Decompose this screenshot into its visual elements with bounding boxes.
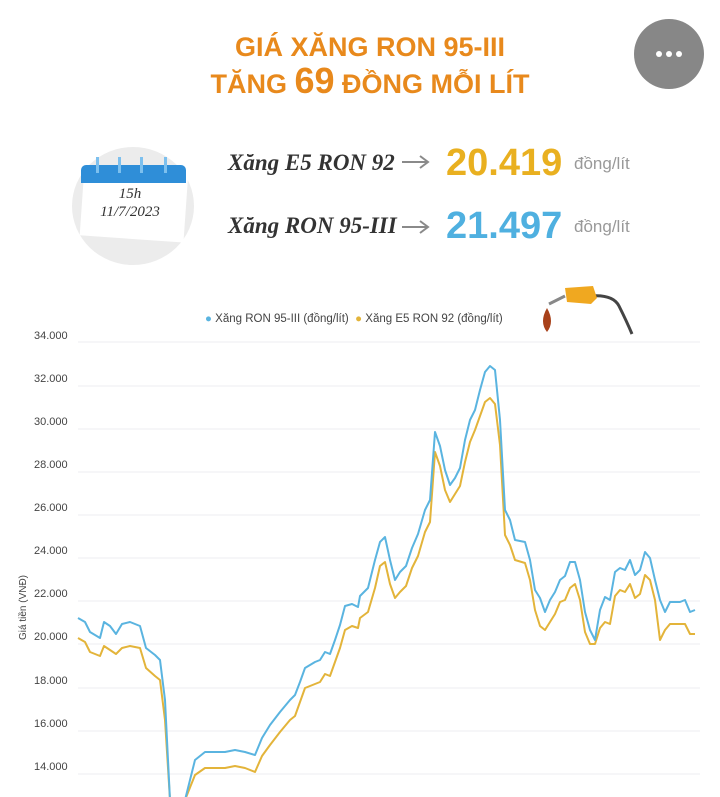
line chart: Giá tiền (VNĐ) — [17, 575, 29, 640]
chart legend: ● Xăng RON 95-III (đồng/lít) ● Xăng E5 RON 92 (đồng/lít) — [205, 313, 503, 325]
text block: E5 price — [227, 142, 630, 184]
line chart: 28.000 — [34, 459, 68, 471]
title: TĂNG 69 ĐỒNG MỖI LÍT — [210, 60, 530, 101]
line chart: 34.000 — [34, 330, 68, 342]
title — [210, 32, 530, 101]
icon: calendar: 11/7/2023 — [100, 204, 160, 220]
line chart: 26.000 — [34, 502, 68, 514]
icon: calendar — [72, 147, 194, 265]
text block: E5 price: Xăng E5 RON 92 — [228, 150, 395, 175]
line chart: 32.000 — [34, 373, 68, 385]
line chart: 22.000 — [34, 588, 68, 600]
title: GIÁ XĂNG RON 95-III — [235, 32, 505, 62]
text block: RON95 price — [227, 205, 630, 247]
line chart — [17, 330, 700, 797]
line chart: 24.000 — [34, 545, 68, 557]
icon: calendar: 15h — [119, 186, 141, 202]
line chart: 20.000 — [34, 631, 68, 643]
line chart: 14.000 — [34, 761, 68, 773]
icon: fuel nozzle — [543, 286, 634, 335]
text block: E5 price: đồng/lít — [574, 154, 630, 173]
text block: RON95 price: đồng/lít — [574, 217, 630, 236]
icon: more button — [634, 19, 704, 89]
text block: RON95 price: 21.497 — [446, 205, 562, 247]
line chart: 18.000 — [34, 675, 68, 687]
line chart: 16.000 — [34, 718, 68, 730]
text block: RON95 price: Xăng RON 95-III — [228, 213, 397, 238]
text block: E5 price: 20.419 — [446, 142, 562, 184]
line chart: 30.000 — [34, 416, 68, 428]
